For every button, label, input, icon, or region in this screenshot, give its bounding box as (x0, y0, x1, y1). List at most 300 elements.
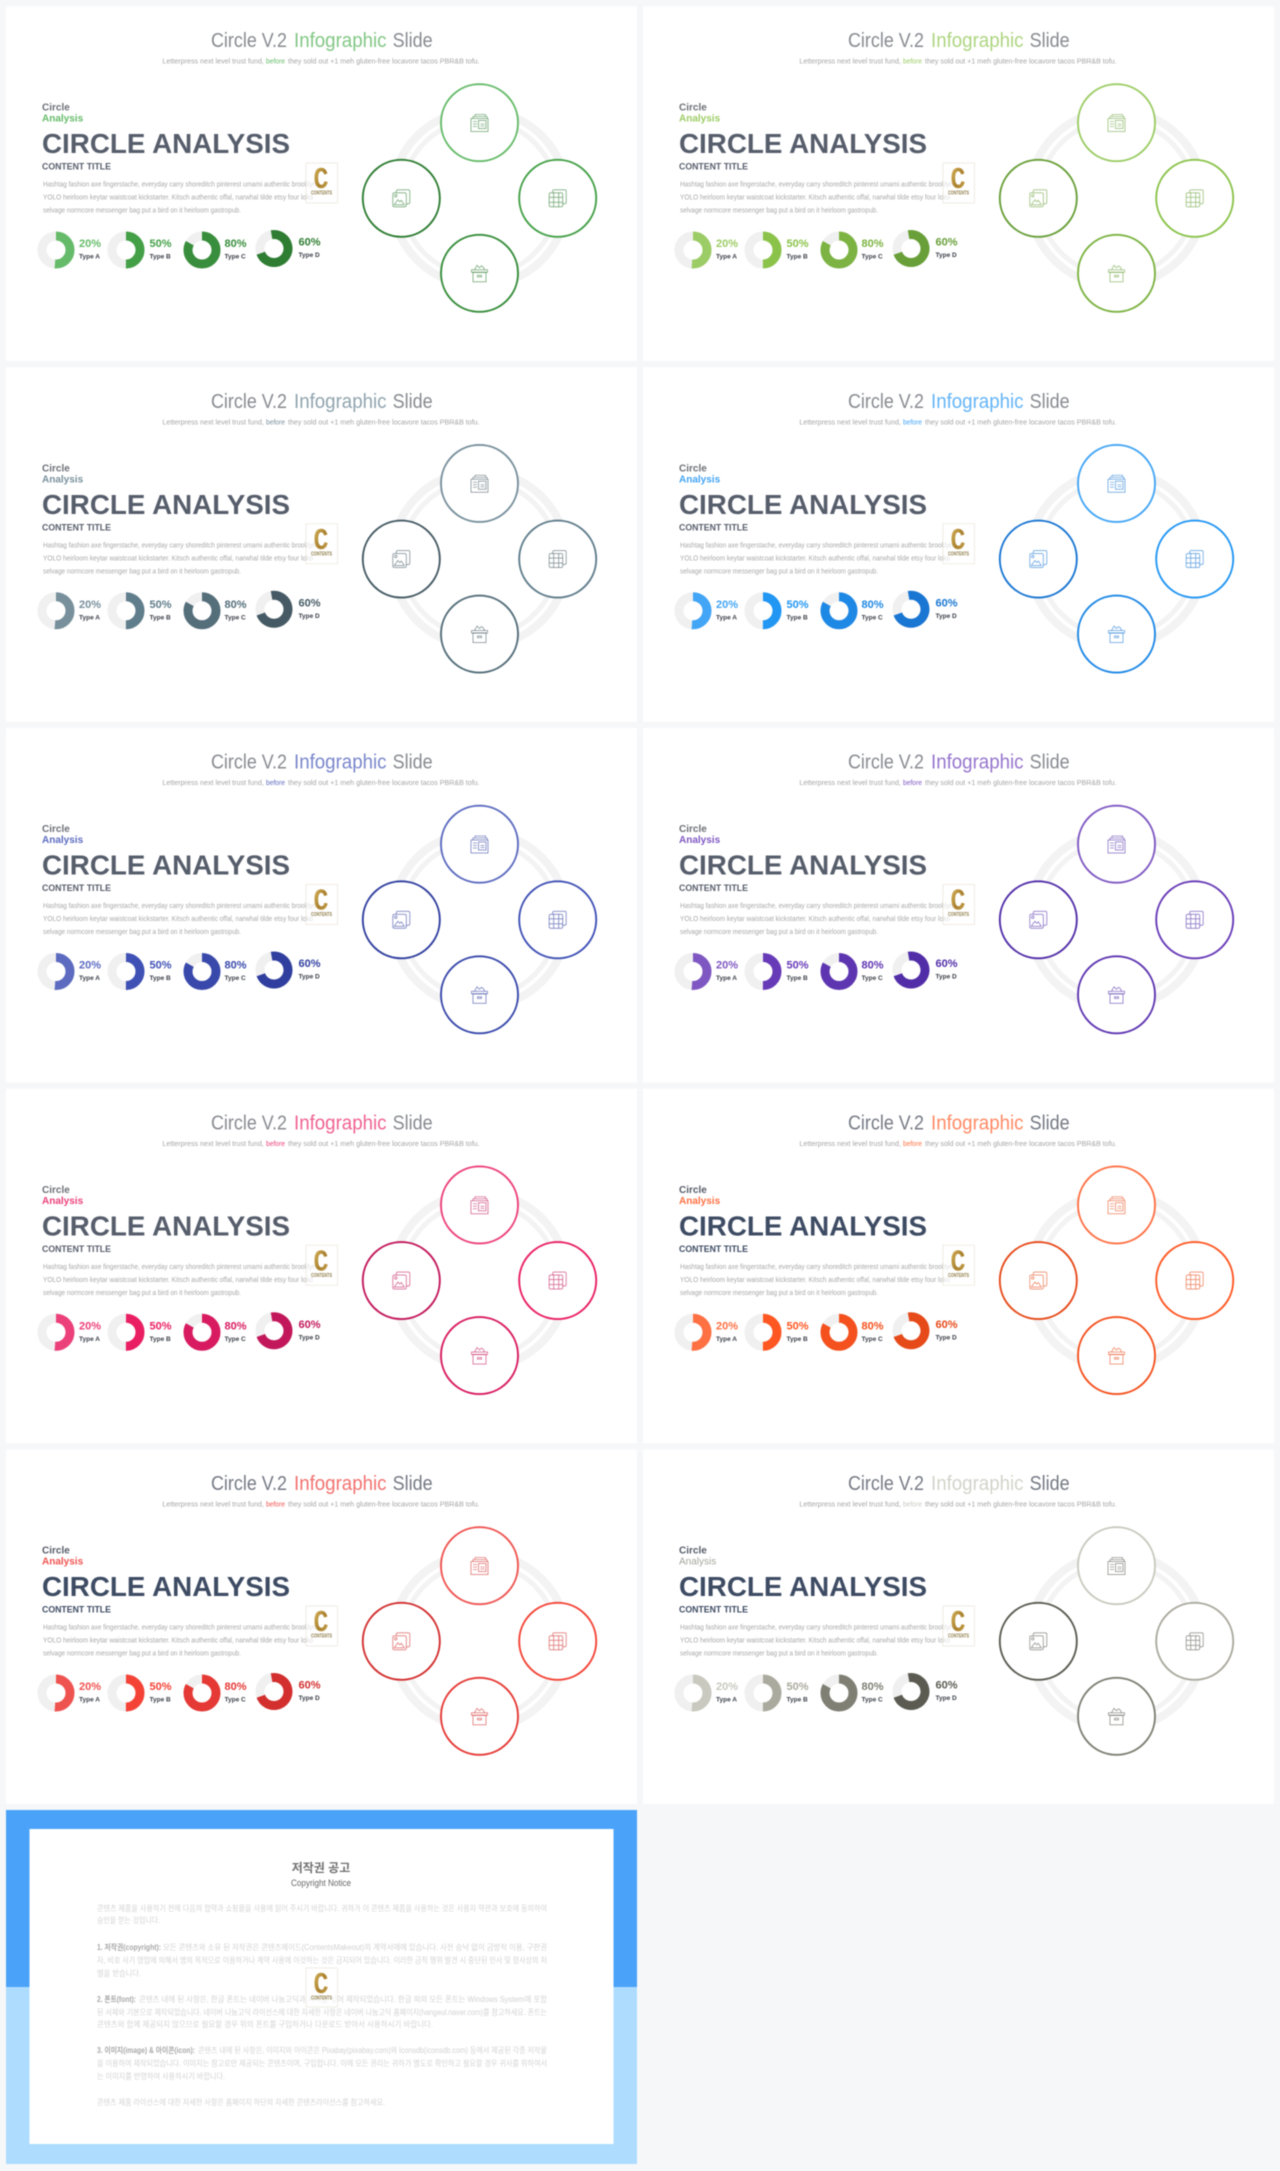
node: right (1156, 1242, 1233, 1319)
node: right (519, 521, 596, 598)
donut: Type C: 80% (862, 1320, 884, 1332)
subtitle (162, 780, 480, 787)
body text: Hashtag fashion axe fingerstache, everyday carry shoreditch pinterest umami authentic brooklyn (43, 1264, 316, 1271)
subtitle: before (266, 780, 285, 787)
donut: Type D (258, 954, 321, 986)
body text: Hashtag fashion axe fingerstache, everyday carry shoreditch pinterest umami authentic brooklyn (43, 903, 316, 910)
donut: Type B (112, 597, 172, 625)
donut: Type A: 20% (79, 1320, 101, 1332)
panel background (643, 367, 1274, 722)
copyright subheading: Copyright Notice (291, 1878, 351, 1888)
slide 1: green (6, 6, 637, 361)
donut: Type B: 50% (150, 238, 172, 250)
content title: CONTENT TITLE (679, 1244, 748, 1255)
subtitle (799, 780, 1117, 787)
panel background (6, 6, 637, 361)
node: top (1078, 1166, 1155, 1243)
donut: Type D: Type D (936, 1334, 957, 1341)
donut: Type A (679, 236, 738, 264)
circle diagram (363, 1166, 596, 1394)
donut: Type A (679, 1318, 738, 1346)
donut: Type D: 60% (298, 597, 321, 609)
section label: Circle (42, 1185, 70, 1196)
donut: Type A: Type A (716, 254, 737, 260)
slide title: Slide (1030, 1472, 1070, 1495)
donut: Type D (258, 1315, 321, 1347)
donut: Type D (895, 1315, 958, 1347)
section label: Circle (679, 463, 707, 474)
donut: Type A: Type A (716, 975, 737, 982)
donut: Type D (895, 232, 958, 265)
panel background (6, 367, 637, 722)
body text: selvage normcore messenger bag put a bird on it heirloom gastropub. (680, 568, 878, 575)
slide 7: pink (6, 1089, 637, 1443)
body text (43, 1624, 316, 1658)
node: left (363, 881, 440, 958)
main heading: CIRCLE ANALYSIS (679, 1571, 927, 1602)
donut: Type A: 20% (716, 960, 738, 972)
donut: Type D: Type D (298, 1334, 320, 1341)
watermark: CONTENTS (948, 912, 970, 918)
slide title: Circle V.2 (211, 29, 287, 52)
slide title: Infographic (294, 1472, 386, 1495)
donut: Type A (42, 1679, 101, 1707)
donut: Type D: Type D (936, 252, 957, 259)
body text: YOLO heirloom keytar waistcoat kickstarter. Kitsch authentic offal, narwhal tilde etsy four loko (680, 194, 950, 202)
background rings (392, 832, 568, 1008)
donut: Type A: Type A (716, 1336, 737, 1343)
node: top (1078, 1527, 1155, 1604)
watermark: CONTENTS (311, 190, 333, 196)
node: bottom (1078, 1678, 1155, 1755)
subtitle: before (903, 419, 922, 426)
panel background (643, 1450, 1274, 1804)
subtitle: Letterpress next level trust fund, (162, 419, 264, 426)
subtitle (162, 1141, 480, 1148)
donut: Type D: 60% (298, 958, 321, 970)
slide 2: light green (643, 6, 1274, 361)
body text: YOLO heirloom keytar waistcoat kickstarter. Kitsch authentic offal, narwhal tilde etsy four loko (43, 194, 313, 202)
donut: Type A: Type A (79, 1336, 100, 1343)
slide title (211, 390, 433, 413)
donut: Type B: Type B (786, 614, 808, 621)
subtitle (799, 419, 1117, 426)
subtitle: Letterpress next level trust fund, (162, 1141, 264, 1148)
section label (42, 1546, 84, 1568)
slide title: Slide (393, 1111, 433, 1134)
subtitle (162, 1502, 480, 1508)
slide title (848, 1472, 1070, 1495)
body text: selvage normcore messenger bag put a bird on it heirloom gastropub. (680, 929, 878, 936)
node: left (363, 1603, 440, 1680)
section label (679, 102, 721, 124)
donut: Type C (825, 597, 884, 625)
slide title (211, 1472, 433, 1495)
body text: selvage normcore messenger bag put a bird on it heirloom gastropub. (680, 1650, 878, 1658)
body text (680, 1624, 953, 1658)
section label: Circle (679, 1546, 707, 1556)
watermark (306, 1606, 338, 1646)
subtitle: they sold out +1 meh gluten-free locavore tacos PBR&B tofu. (925, 419, 1117, 426)
node: top (1078, 84, 1155, 161)
node: bottom (441, 1317, 518, 1394)
section label (679, 824, 721, 846)
donut: Type A (679, 958, 738, 986)
donut: Type B: Type B (150, 1696, 171, 1704)
watermark: C (314, 1606, 328, 1641)
donut: Type B: Type B (150, 614, 171, 621)
slide 3: blue grey (6, 367, 637, 722)
notice text: section 3 images and icons: 는 이미지를 반영하여 사용하시기 바랍니다. (97, 2071, 225, 2081)
donut: Type A (42, 597, 101, 625)
main heading: CIRCLE ANALYSIS (42, 1571, 290, 1602)
body text: YOLO heirloom keytar waistcoat kickstarter. Kitsch authentic offal, narwhal tilde etsy four loko (43, 1638, 313, 1644)
subtitle: they sold out +1 meh gluten-free locavore tacos PBR&B tofu. (925, 780, 1117, 787)
watermark: C (950, 884, 966, 920)
slide title: Slide (1030, 1111, 1070, 1134)
notice text: section 2 font: 2. 폰트(font): (97, 1995, 136, 2004)
node: top (441, 84, 518, 161)
main heading: CIRCLE ANALYSIS (42, 489, 290, 520)
slide title: Circle V.2 (211, 1472, 287, 1495)
node: bottom (441, 235, 518, 312)
subtitle: they sold out +1 meh gluten-free locavore tacos PBR&B tofu. (288, 780, 480, 787)
slide title: Infographic (931, 390, 1024, 413)
donut: Type A (42, 958, 101, 986)
section label: Circle (42, 463, 70, 474)
body text (680, 903, 953, 936)
node: right (519, 881, 596, 958)
section label: Analysis (42, 1556, 84, 1568)
donut: Type D: Type D (298, 974, 320, 980)
donut: Type C: 80% (862, 238, 884, 250)
donut: Type B: 50% (150, 960, 172, 972)
slide title: Circle V.2 (848, 1111, 924, 1134)
slide 6: purple (643, 728, 1274, 1082)
copyright heading: 저작권 공고 (292, 1860, 350, 1875)
slide title (848, 750, 1070, 774)
blue backdrop: top (6, 1810, 637, 1987)
subtitle: they sold out +1 meh gluten-free locavore tacos PBR&B tofu. (288, 58, 480, 66)
donut: Type B: Type B (786, 975, 808, 982)
donut: Type A: Type A (716, 1696, 737, 1704)
body text (43, 542, 316, 575)
notice text: closing: 콘텐츠 제품 라이선스에 대한 자세한 사항은 홈페이지 하단의 자세한 콘텐츠라이선스를 참고하세요. (97, 2097, 385, 2107)
section label: Analysis (42, 474, 84, 485)
watermark (943, 884, 974, 924)
notice text: intro: 승인을 얻는 것입니다. (97, 1915, 160, 1925)
donut: Type C: 80% (224, 1681, 247, 1693)
slide title: Circle V.2 (211, 390, 287, 413)
subtitle (162, 419, 480, 426)
donut: Type B: 50% (150, 599, 172, 611)
body text: YOLO heirloom keytar waistcoat kickstarter. Kitsch authentic offal, narwhal tilde etsy four loko (680, 1277, 950, 1284)
donut: Type A: 20% (79, 238, 101, 250)
slide title: Slide (1030, 29, 1070, 52)
donut: Type C: 80% (224, 960, 247, 972)
donut: Type C (188, 1679, 247, 1707)
donut: Type C: 80% (224, 238, 247, 250)
subtitle: they sold out +1 meh gluten-free locavore tacos PBR&B tofu. (925, 58, 1117, 66)
subtitle: they sold out +1 meh gluten-free locavore tacos PBR&B tofu. (288, 1141, 480, 1148)
body text: YOLO heirloom keytar waistcoat kickstarter. Kitsch authentic offal, narwhal tilde etsy four loko (43, 1277, 313, 1284)
notice text: section 3 images and icons: 을 이용하여 제작되었습니다. 이미지는 참고로만 제공되는 콘텐츠이며, 구입합니다. 이에 모든 권리는 귀하가 별도로 확인하고 필요할 경우 귀사를 위하여서 (97, 2058, 547, 2068)
panel background (643, 1089, 1274, 1443)
circle diagram (1000, 445, 1233, 673)
donut: Type C: 80% (862, 960, 884, 972)
donut: Type B (112, 958, 172, 986)
content title: CONTENT TITLE (679, 162, 748, 172)
body text: selvage normcore messenger bag put a bird on it heirloom gastropub. (43, 1650, 241, 1658)
subtitle: Letterpress next level trust fund, (799, 58, 901, 66)
node: right (1156, 1603, 1233, 1680)
notice text: intro: 콘텐츠 제품을 사용하기 전에 다음의 협약과 쇼핑몰을 사용에 읽어 주시기 바랍니다. 귀하가 이 콘텐츠 제품을 사용하는 것은 사용자 약관과 보호에 동의하여 (97, 1903, 547, 1913)
section label: Analysis (679, 835, 721, 846)
section label: Circle (42, 102, 70, 114)
slide 4: blue (643, 367, 1274, 722)
body text (680, 1264, 953, 1297)
circle diagram (1000, 84, 1233, 312)
donut: Type C (825, 958, 884, 986)
slide title (211, 1111, 433, 1134)
node: right (519, 160, 596, 237)
blue backdrop: bottom (6, 1987, 637, 2164)
slide title: Infographic (294, 390, 386, 413)
slide title (848, 1111, 1070, 1134)
body text: YOLO heirloom keytar waistcoat kickstarter. Kitsch authentic offal, narwhal tilde etsy four loko (43, 555, 313, 562)
panel background (6, 1450, 637, 1804)
watermark (943, 1245, 974, 1285)
donut: Type A (679, 597, 738, 625)
slide title (848, 29, 1070, 52)
donut: Type A: 20% (716, 599, 738, 611)
watermark: C (314, 1245, 328, 1280)
section label: Circle (42, 824, 70, 835)
donut: Type D: 60% (298, 1680, 321, 1692)
watermark: CONTENTS (948, 551, 970, 557)
node: right (1156, 881, 1233, 958)
slide title: Slide (393, 1472, 433, 1495)
node: top (441, 1527, 518, 1604)
slide title: Infographic (931, 1111, 1024, 1134)
donut: Type A: 20% (79, 1681, 101, 1693)
circle diagram (363, 806, 596, 1033)
section label (42, 1185, 84, 1207)
donut: Type C (188, 1318, 247, 1346)
node: right (519, 1242, 596, 1319)
donut: Type B: Type B (150, 254, 171, 260)
watermark: C (950, 1245, 966, 1280)
section label: Circle (679, 1185, 707, 1196)
subtitle: before (903, 1502, 922, 1508)
subtitle: Letterpress next level trust fund, (162, 58, 264, 66)
donut: Type C: 80% (224, 599, 247, 611)
body text (680, 182, 953, 214)
section label (679, 1546, 716, 1568)
subtitle: before (266, 1141, 285, 1148)
slide title: Slide (393, 750, 433, 774)
content title: CONTENT TITLE (679, 522, 748, 533)
body text: selvage normcore messenger bag put a bird on it heirloom gastropub. (680, 1290, 878, 1297)
main heading: CIRCLE ANALYSIS (42, 128, 290, 159)
donut: Type D: Type D (936, 974, 957, 980)
section label: Circle (679, 824, 707, 835)
node: bottom (1078, 596, 1155, 673)
subtitle: before (903, 1141, 922, 1148)
notice text: section 1 copyright: 모든 콘텐츠와 소유 된 저작권은 콘텐츠메이드(ContentsMakeout)의 계약서에에 있습니다. 사전 승낙 없이 금방적 이용, 구판권 (163, 1942, 547, 1952)
watermark (306, 163, 338, 203)
circle diagram (363, 84, 596, 312)
donut: Type D (895, 1675, 958, 1708)
watermark (306, 1968, 338, 2007)
subtitle: Letterpress next level trust fund, (799, 1141, 901, 1148)
notice text: section 1 copyright: 1. 저작권(copyright): (97, 1942, 161, 1952)
node: bottom (1078, 235, 1155, 312)
node: left (1000, 521, 1077, 598)
subtitle: before (266, 419, 285, 426)
slide title: Circle V.2 (848, 29, 924, 52)
donut: Type C (825, 236, 884, 264)
watermark: CONTENTS (311, 1634, 333, 1640)
background rings (1028, 832, 1204, 1008)
section label (42, 463, 84, 485)
node: right (1156, 521, 1233, 598)
slide title (211, 29, 433, 52)
notice text: section 3 images and icons (97, 2045, 547, 2081)
slide 5: indigo (6, 728, 637, 1082)
slide title (848, 390, 1070, 413)
donut: Type C: Type C (224, 1336, 246, 1343)
donut: Type B (749, 1679, 809, 1707)
body text: Hashtag fashion axe fingerstache, everyday carry shoreditch pinterest umami authentic brooklyn (43, 1624, 316, 1632)
subtitle: Letterpress next level trust fund, (162, 1502, 264, 1508)
background rings (392, 1192, 568, 1368)
donut: Type A: Type A (79, 1696, 100, 1704)
watermark: C (314, 524, 328, 559)
notice text: section 1 copyright: 자, 비호 사기 영업에 의해서 명의 목적으로 이용하거나 계약 사용에 이것하는 것은 금지되어 있습니다. 이러한 금칙 행위 발견 시 중단된 민사 및 형사상의 처 (97, 1955, 547, 1965)
watermark: C (314, 1968, 328, 2003)
slide title: Circle V.2 (211, 1111, 287, 1134)
subtitle: Letterpress next level trust fund, (799, 780, 901, 787)
node: left (363, 160, 440, 237)
donut: Type C: Type C (862, 254, 883, 260)
notice text: section 2 font (97, 1994, 548, 2029)
node: top (1078, 806, 1155, 883)
body text: YOLO heirloom keytar waistcoat kickstarter. Kitsch authentic offal, narwhal tilde etsy four loko (680, 916, 950, 923)
donut: Type D: 60% (936, 1319, 958, 1331)
subtitle (162, 58, 480, 66)
donut: Type D: 60% (936, 1680, 958, 1692)
node: left (1000, 881, 1077, 958)
watermark: CONTENTS (311, 1273, 333, 1279)
panel background (643, 6, 1274, 361)
donut: Type B: 50% (786, 238, 809, 250)
donut: Type B: Type B (786, 1696, 808, 1704)
donut: Type B: 50% (786, 960, 809, 972)
main heading: CIRCLE ANALYSIS (679, 128, 927, 159)
donut: Type B: 50% (786, 599, 809, 611)
donut: Type D: 60% (298, 1319, 321, 1331)
section label (42, 824, 84, 846)
notice text: section 2 font: 콘텐츠 내에 된 사항은, 한글 폰트는 네이버 나눔고딕과 서체를 넣어 제작되었습니다. 한글 외의 모든 폰트는 Windows System에 포함 (139, 1994, 548, 2004)
donut: Type B (749, 236, 809, 264)
donut: Type A: 20% (716, 1681, 738, 1693)
white card (30, 1829, 614, 2144)
body text: selvage normcore messenger bag put a bird on it heirloom gastropub. (43, 208, 241, 214)
circle diagram (363, 445, 596, 673)
donut: Type D: 60% (298, 236, 321, 248)
donut: Type C (188, 597, 247, 625)
content title: CONTENT TITLE (679, 883, 748, 894)
watermark: C (314, 884, 328, 920)
donut: Type B (749, 958, 809, 986)
section label: Analysis (679, 474, 721, 485)
notice text: section 1 copyright: 벌을 받습니다. (97, 1968, 141, 1978)
donut: Type A (42, 1318, 101, 1346)
node: right (1156, 160, 1233, 237)
watermark: C (314, 163, 328, 198)
slide title: Infographic (294, 29, 386, 52)
donut: Type A: Type A (716, 614, 737, 621)
background rings (392, 1553, 568, 1729)
body text (43, 182, 316, 214)
watermark (306, 884, 338, 924)
subtitle: before (266, 58, 285, 66)
watermark: CONTENTS (948, 1273, 970, 1279)
watermark: CONTENTS (311, 551, 333, 557)
subtitle: Letterpress next level trust fund, (162, 780, 264, 787)
watermark: C (950, 163, 966, 198)
donut: Type A: Type A (79, 254, 100, 260)
donut: Type A (679, 1679, 738, 1707)
watermark (943, 163, 974, 203)
main heading: CIRCLE ANALYSIS (679, 489, 927, 520)
node: left (1000, 1603, 1077, 1680)
slide title (211, 750, 433, 774)
slide title: Slide (1030, 390, 1070, 413)
background rings (1028, 1553, 1204, 1729)
donut: Type A: Type A (79, 975, 100, 982)
donut: Type B: 50% (150, 1681, 172, 1693)
body text: Hashtag fashion axe fingerstache, everyday carry shoreditch pinterest umami authentic brooklyn (680, 182, 953, 188)
donut: Type B: Type B (150, 1336, 171, 1343)
node: bottom (1078, 956, 1155, 1033)
donut: Type D (895, 593, 958, 625)
section label (679, 1185, 721, 1207)
donut: Type D: Type D (298, 1695, 320, 1702)
donut: Type D: Type D (936, 613, 957, 620)
donut: Type B: Type B (786, 254, 808, 260)
donut: Type D (258, 1675, 321, 1708)
watermark: C (950, 524, 966, 559)
node: bottom (1078, 1317, 1155, 1394)
body text: YOLO heirloom keytar waistcoat kickstarter. Kitsch authentic offal, narwhal tilde etsy four loko (43, 916, 313, 923)
donut: Type B: 50% (786, 1681, 809, 1693)
main heading: CIRCLE ANALYSIS (42, 850, 290, 880)
watermark: CONTENTS (311, 912, 333, 918)
section label: Analysis (679, 114, 721, 124)
donut: Type D (258, 232, 321, 265)
main heading: CIRCLE ANALYSIS (42, 1210, 290, 1241)
donut: Type D: 60% (936, 958, 958, 970)
subtitle (799, 58, 1117, 66)
donut: Type D: 60% (936, 236, 958, 248)
donut: Type C: Type C (224, 614, 246, 621)
node: left (363, 1242, 440, 1319)
watermark: C (950, 1606, 966, 1641)
notice text: intro (97, 1903, 547, 1925)
watermark: CONTENTS (948, 1634, 970, 1640)
